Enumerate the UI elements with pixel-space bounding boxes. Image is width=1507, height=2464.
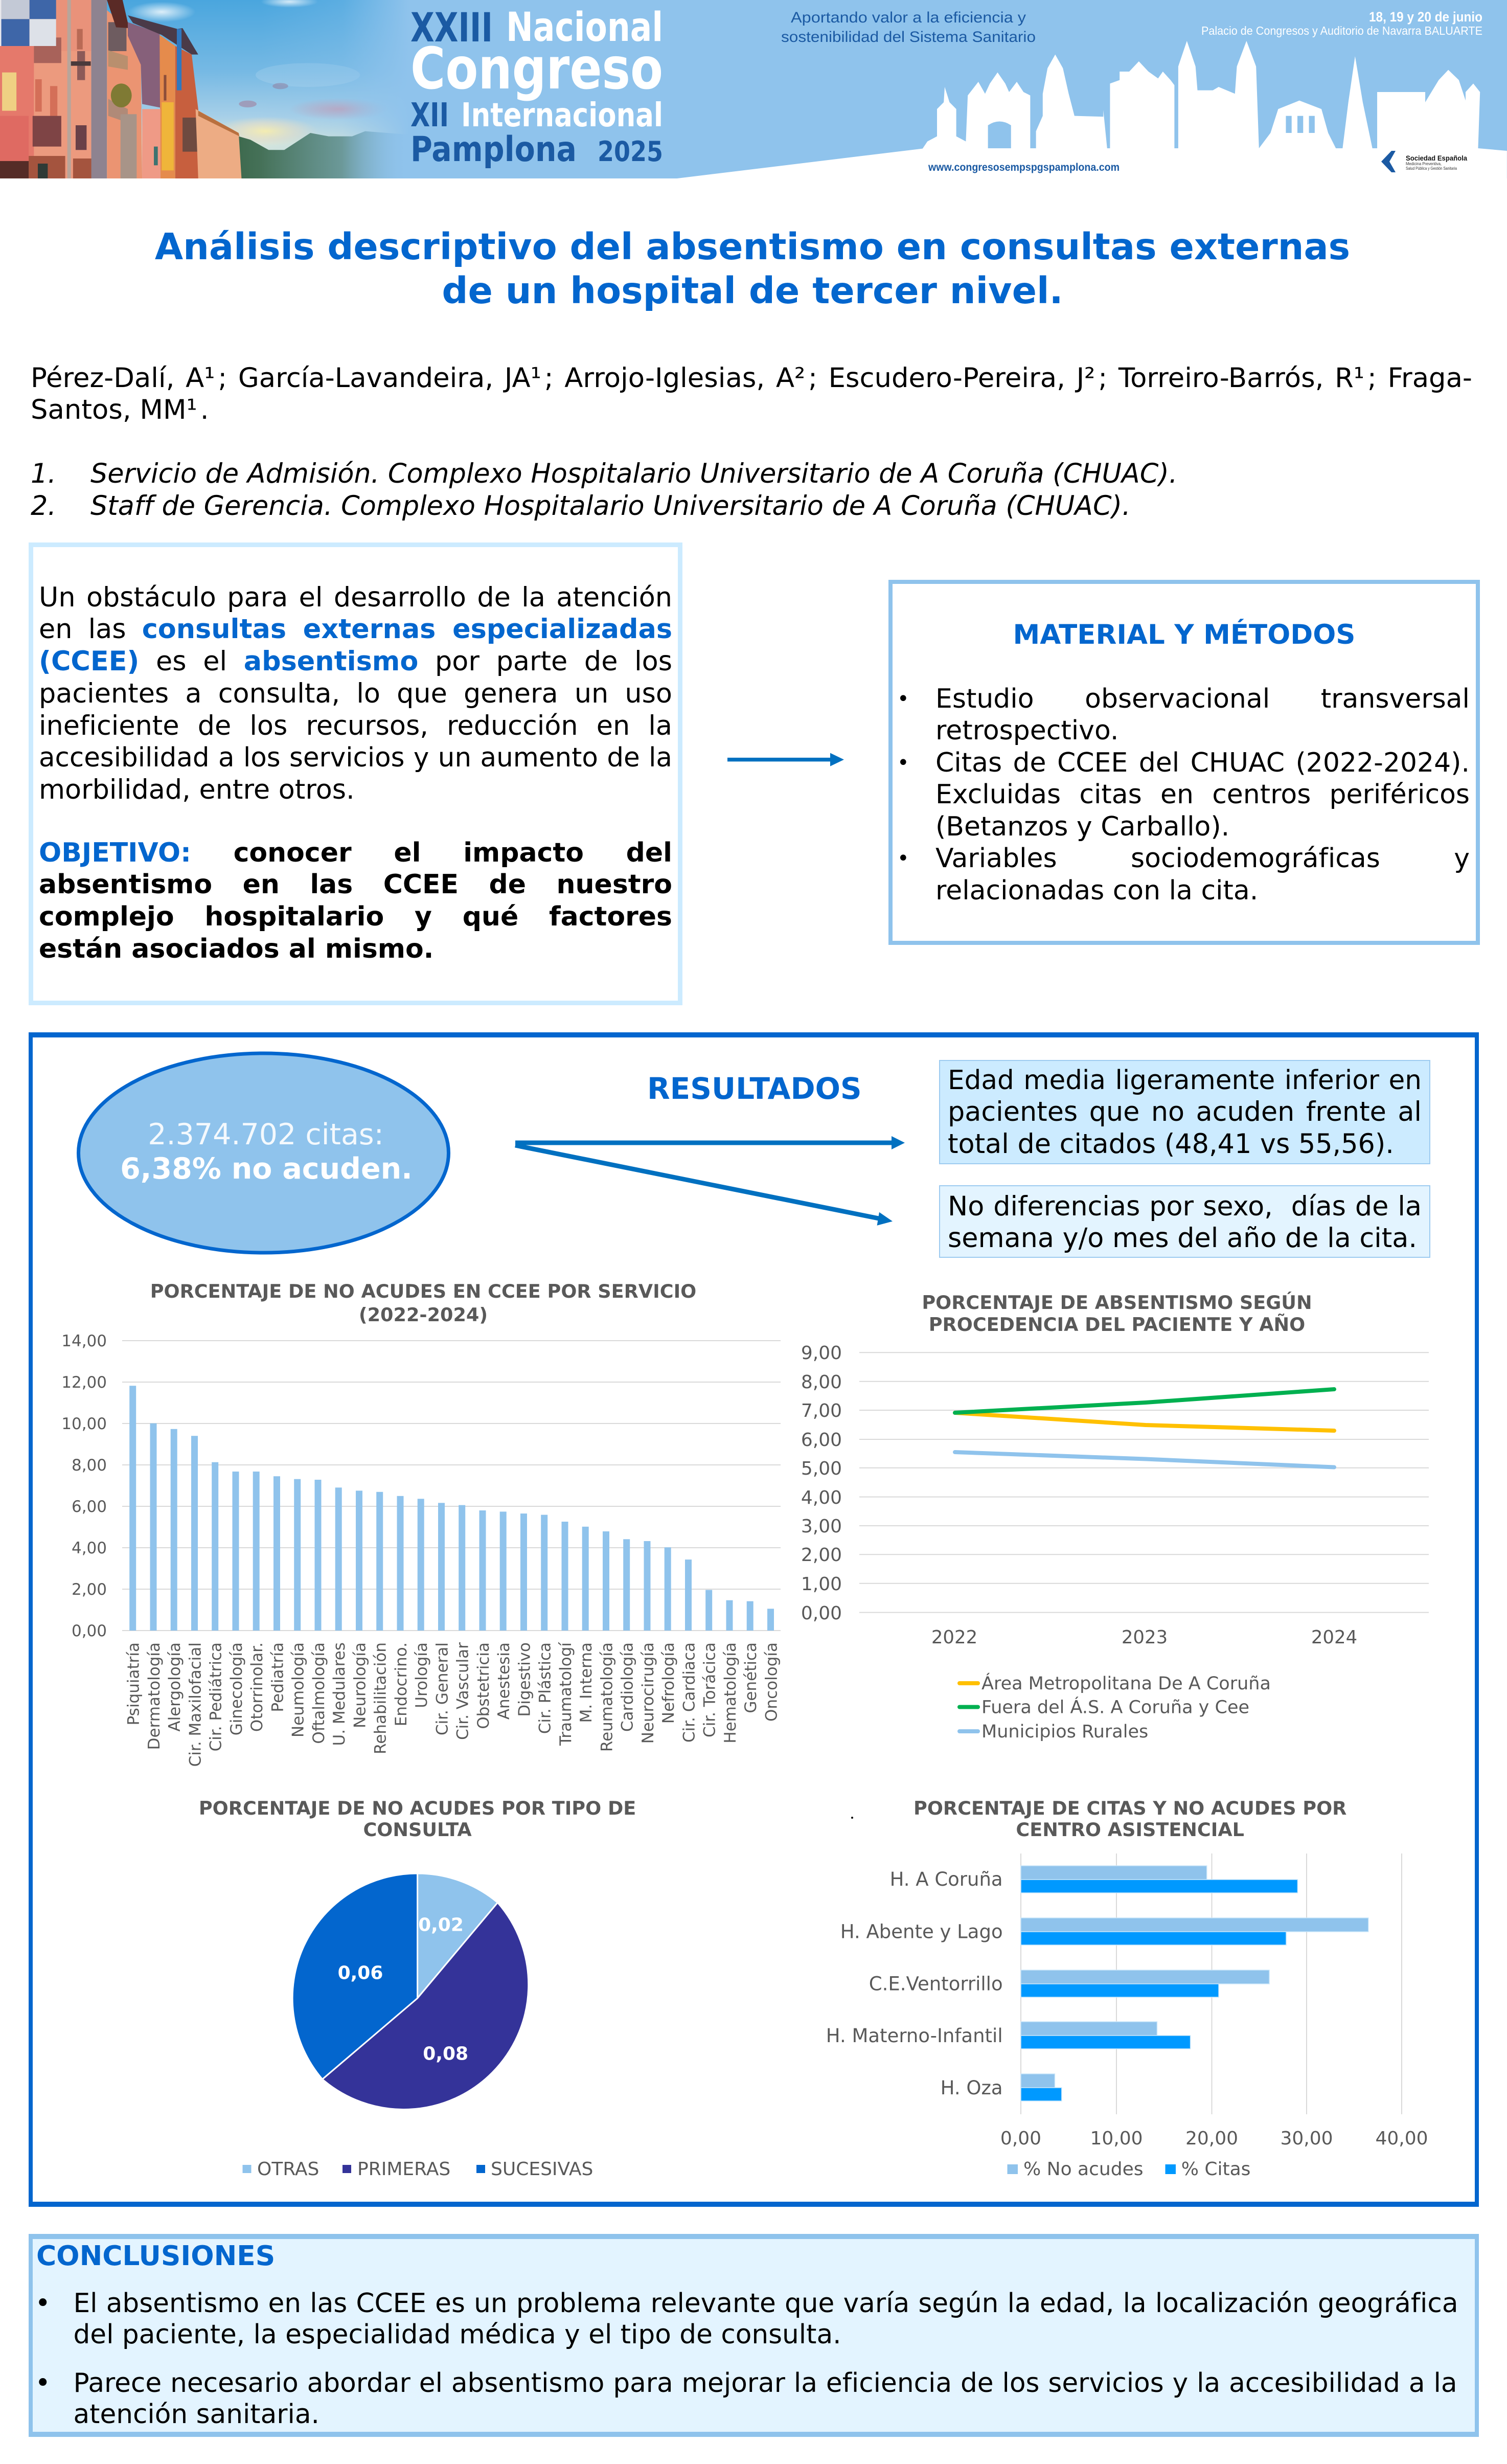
panel: conclusiones: • xyxy=(35,2288,51,2319)
bar chart: no-shows by service: Oncología xyxy=(763,1642,781,1722)
congress name: 2025 xyxy=(598,135,663,168)
bar chart: no-shows by service: Ginecología xyxy=(227,1642,246,1735)
conclusion one: del paciente, la especialidad médica y el tipo de consulta. xyxy=(74,2319,841,2350)
objective text: absentismo en las CCEE de nuestro xyxy=(39,869,672,900)
pie chart: no-shows by consultation type: PORCENTAJE DE NO ACUDES POR TIPO DE xyxy=(199,1797,636,1819)
conclusion two xyxy=(35,2368,1457,2430)
callout: total appointments ellipse xyxy=(77,1051,450,1255)
conclusion two: Parece necesario abordar el absentismo para mejorar la eficiencia de los servicios y la accesibilidad a la xyxy=(74,2368,1457,2399)
bar chart: appointments and no-shows by centre: C.E.Ventorrillo xyxy=(869,1973,1003,1995)
panel: material y metodos: • xyxy=(897,751,909,775)
methods list: Estudio observacional transversal xyxy=(935,684,1470,714)
line chart: absenteeism by origin and year: 0,00 xyxy=(801,1603,842,1624)
congress tagline: sostenibilidad del Sistema Sanitario xyxy=(781,29,1036,46)
bar chart: no-shows by service xyxy=(61,1280,781,1767)
conclusion one: El absentismo en las CCEE es un problema relevante que varía según la edad, la localización geográfica xyxy=(74,2288,1458,2319)
bar chart: no-shows by service: Cir. Pediátrica xyxy=(207,1642,225,1751)
bar chart: appointments and no-shows by centre: 40,00 xyxy=(1375,2128,1428,2149)
bar chart: no-shows by service: Alergología xyxy=(166,1642,184,1732)
objective text: complejo hospitalario y qué factores xyxy=(39,901,672,932)
bar chart: no-shows by service: 0,00 xyxy=(72,1622,107,1640)
introduction text: accesibilidad a los servicios y un aumento de la xyxy=(39,742,672,773)
methods list: relacionadas con la cita. xyxy=(935,875,1258,906)
bar chart: no-shows by service: 10,00 xyxy=(61,1415,107,1433)
bar chart: appointments and no-shows by centre: CENTRO ASISTENCIAL xyxy=(1016,1819,1244,1841)
bar chart: no-shows by service: 2,00 xyxy=(72,1580,107,1599)
bar chart: no-shows by service: Anestesia xyxy=(495,1642,513,1720)
bar chart: appointments and no-shows by centre: % No acudes xyxy=(1023,2159,1143,2180)
bar chart: no-shows by service: Pediatría xyxy=(269,1642,287,1712)
line chart: absenteeism by origin and year: 2023 xyxy=(1122,1627,1168,1648)
authors: Pérez-Dalí, A¹; García-Lavandeira, JA¹; Arrojo-Iglesias, A²; Escudero-Pereira, J²; Torreiro-Barrós, R¹; Fraga- xyxy=(31,363,1472,394)
bar chart: no-shows by service: 6,00 xyxy=(72,1498,107,1516)
bar chart: no-shows by service: 8,00 xyxy=(72,1456,107,1475)
bar chart: no-shows by service: Dermatología xyxy=(145,1642,164,1750)
authors xyxy=(31,363,1472,425)
panel: resultados xyxy=(29,1032,1479,2207)
bar chart: no-shows by service: Genética xyxy=(742,1642,760,1713)
methods list: (Betanzos y Carballo). xyxy=(935,811,1229,842)
bar chart: appointments and no-shows by centre: H. Abente y Lago xyxy=(840,1921,1003,1943)
affiliations: Servicio de Admisión. Complexo Hospitalario Universitario de A Coruña (CHUAC). xyxy=(90,458,1177,489)
society logo: Salud Pública y Gestión Sanitaria xyxy=(1406,166,1457,171)
bar chart: appointments and no-shows by centre: 10,00 xyxy=(1090,2128,1143,2149)
bar chart: no-shows by service: Reumatología xyxy=(598,1642,616,1752)
line chart: absenteeism by origin and year: 2024 xyxy=(1311,1627,1357,1648)
line chart: absenteeism by origin and year xyxy=(801,1291,1429,1742)
line chart: absenteeism by origin and year: 1,00 xyxy=(801,1574,842,1595)
bar chart: no-shows by service: 4,00 xyxy=(72,1539,107,1557)
date and venue: 18, 19 y 20 de junio xyxy=(1369,9,1482,25)
affiliations: 2. xyxy=(31,490,56,522)
congress name: Congreso xyxy=(410,36,663,102)
congress name: Nacional xyxy=(506,5,663,51)
bar chart: no-shows by service: Cir. Torácica xyxy=(701,1642,719,1737)
bar chart: no-shows by service: Nefrología xyxy=(659,1642,678,1724)
line chart: absenteeism by origin and year: 2022 xyxy=(931,1627,977,1648)
introduction text: ineficiente de los recursos, reducción en la xyxy=(39,710,672,741)
bar chart: no-shows by service: M. Interna xyxy=(577,1642,596,1723)
line chart: absenteeism by origin and year: 2,00 xyxy=(801,1545,842,1566)
objective text xyxy=(39,838,672,964)
callout: total appointments ellipse: 6,38% no acuden. xyxy=(120,1152,413,1186)
congress name xyxy=(410,5,663,170)
date and venue xyxy=(1201,9,1482,37)
methods list: Citas de CCEE del CHUAC (2022-2024). xyxy=(935,748,1470,778)
skyline silhouette xyxy=(673,41,1507,179)
bar chart: no-shows by service: Hematología xyxy=(721,1642,740,1744)
bar chart: no-shows by service: Rehabilitación xyxy=(372,1642,390,1754)
bar chart: no-shows by service: 14,00 xyxy=(61,1332,107,1350)
heading: resultados: RESULTADOS xyxy=(647,1071,862,1106)
title: Análisis descriptivo del absentismo en consultas externas xyxy=(155,225,1350,268)
title: de un hospital de tercer nivel. xyxy=(442,269,1063,312)
pie chart: no-shows by consultation type: OTRAS xyxy=(257,2159,319,2180)
panel: conclusiones: • xyxy=(35,2368,51,2399)
bar chart: no-shows by service: Otorrinolar. xyxy=(248,1642,266,1732)
conclusions heading: CONCLUSIONES xyxy=(36,2240,275,2272)
line chart: absenteeism by origin and year: 7,00 xyxy=(801,1400,842,1421)
introduction text: pacientes a consulta, lo que genera un uso xyxy=(39,678,672,709)
introduction text xyxy=(39,582,672,805)
methods list: retrospectivo. xyxy=(935,715,1118,746)
bar chart: no-shows by service: Cir. Plástica xyxy=(536,1642,555,1734)
bar chart: appointments and no-shows by centre: H. A Coruña xyxy=(890,1868,1003,1890)
objective text: OBJETIVO: conocer el impacto del xyxy=(39,838,672,868)
bar chart: no-shows by service: Psiquiatría xyxy=(125,1642,143,1725)
bar chart: no-shows by service: Neurocirugía xyxy=(639,1642,657,1744)
bar chart: no-shows by service: Oftalmología xyxy=(310,1642,328,1744)
line chart: absenteeism by origin and year: 8,00 xyxy=(801,1372,842,1393)
bar chart: no-shows by service: Cir. Vascular xyxy=(454,1642,472,1740)
bar chart: no-shows by service: (2022-2024) xyxy=(359,1304,488,1326)
introduction text: morbilidad, entre otros. xyxy=(39,774,355,805)
bar chart: no-shows by service: Digestivo xyxy=(515,1642,534,1716)
congress url: www.congresosempspgspamplona.com xyxy=(928,162,1120,173)
objective text: están asociados al mismo. xyxy=(39,934,433,964)
conclusion one xyxy=(35,2288,1458,2350)
pie chart: no-shows by consultation type: 0,08 xyxy=(423,2044,468,2065)
congress tagline xyxy=(781,9,1036,46)
bar chart: no-shows by service: U. Medulares xyxy=(330,1642,349,1746)
congress name: XXIII xyxy=(410,5,493,51)
bar chart: appointments and no-shows by centre: PORCENTAJE DE CITAS Y NO ACUDES POR xyxy=(914,1797,1346,1819)
bar chart: appointments and no-shows by centre: H. Oza xyxy=(941,2077,1003,2099)
bar chart: appointments and no-shows by centre: 20,00 xyxy=(1185,2128,1238,2149)
bar chart: no-shows by service: Cir. General xyxy=(433,1642,452,1735)
panel: material y metodos: • xyxy=(897,847,909,870)
bar chart: no-shows by service: Urología xyxy=(413,1642,431,1708)
line chart: absenteeism by origin and year: 3,00 xyxy=(801,1516,842,1537)
header photo xyxy=(0,0,409,178)
authors: Santos, MM¹. xyxy=(31,394,209,425)
panel: introduction and objective xyxy=(29,542,682,1005)
bar chart: no-shows by service: PORCENTAJE DE NO ACUDES EN CCEE POR SERVICIO xyxy=(150,1280,696,1302)
society logo xyxy=(1381,151,1467,172)
line chart: absenteeism by origin and year: Municipios Rurales xyxy=(981,1722,1148,1742)
line chart: absenteeism by origin and year: Fuera del Á.S. A Coruña y Cee xyxy=(981,1697,1249,1718)
methods list: Variables sociodemográficas y xyxy=(935,843,1470,874)
affiliations: Staff de Gerencia. Complexo Hospitalario Universitario de A Coruña (CHUAC). xyxy=(90,490,1131,522)
affiliations: 1. xyxy=(31,458,56,489)
finding: mean age xyxy=(939,1060,1430,1164)
bar chart: appointments and no-shows by centre: 0,00 xyxy=(1000,2128,1041,2149)
line chart: absenteeism by origin and year: 6,00 xyxy=(801,1430,842,1451)
line chart: absenteeism by origin and year: 4,00 xyxy=(801,1487,842,1508)
panel: material y metodos xyxy=(888,580,1480,945)
arrows to findings xyxy=(515,1136,905,1226)
panel: conclusiones xyxy=(29,2234,1479,2437)
bar chart: no-shows by service: Endocrino. xyxy=(392,1642,410,1726)
finding: no differences xyxy=(939,1185,1430,1258)
pie chart: no-shows by consultation type: PRIMERAS xyxy=(357,2159,450,2180)
date and venue: Palacio de Congresos y Auditorio de Navarra BALUARTE xyxy=(1201,24,1482,37)
line chart: absenteeism by origin and year: 5,00 xyxy=(801,1458,842,1479)
introduction text: en las consultas externas especializadas xyxy=(39,614,672,645)
bar chart: no-shows by service: Neumología xyxy=(289,1642,308,1737)
methods list: Excluidas citas en centros periféricos xyxy=(935,779,1470,810)
bar chart: appointments and no-shows by centre: H. Materno-Infantil xyxy=(826,2025,1003,2047)
congress tagline: Aportando valor a la eficiencia y xyxy=(791,9,1026,26)
title xyxy=(155,225,1350,312)
line chart: absenteeism by origin and year: PROCEDENCIA DEL PACIENTE Y AÑO xyxy=(929,1313,1305,1336)
finding: mean age: Edad media ligeramente inferior en xyxy=(948,1065,1422,1096)
pie chart: no-shows by consultation type xyxy=(199,1797,636,2180)
bar chart: appointments and no-shows by centre xyxy=(826,1797,1428,2180)
panel: material y metodos: • xyxy=(897,687,909,711)
bar chart: no-shows by service: Traumatologí xyxy=(557,1642,575,1746)
bar chart: no-shows by service: Obstetricia xyxy=(474,1642,493,1729)
bar chart: no-shows by service: Cir. Cardiaca xyxy=(680,1642,698,1743)
introduction text: Un obstáculo para el desarrollo de la atención xyxy=(39,582,672,613)
affiliations xyxy=(31,458,1177,522)
finding: no differences: No diferencias por sexo, días de la xyxy=(948,1191,1422,1222)
finding: no differences: semana y/o mes del año de la cita. xyxy=(948,1223,1417,1254)
finding: mean age: total de citados (48,41 vs 55,56). xyxy=(948,1128,1394,1160)
bar chart: appointments and no-shows by centre: % Citas xyxy=(1181,2159,1250,2180)
pie chart: no-shows by consultation type: 0,06 xyxy=(338,1963,383,1984)
methods list xyxy=(897,684,1470,906)
congress name: XII xyxy=(410,97,449,134)
line chart: absenteeism by origin and year: Área Metropolitana De A Coruña xyxy=(981,1672,1271,1694)
pie chart: no-shows by consultation type: 0,02 xyxy=(418,1914,464,1936)
bar chart: appointments and no-shows by centre: 30,00 xyxy=(1280,2128,1333,2149)
bar chart: no-shows by service: Neurología xyxy=(351,1642,369,1728)
line chart: absenteeism by origin and year: 9,00 xyxy=(801,1343,842,1364)
callout: total appointments ellipse: 2.374.702 citas: xyxy=(148,1118,384,1151)
society logo: Sociedad Española xyxy=(1406,154,1467,162)
arrow: introduction to methods xyxy=(727,753,844,766)
congress name: Internacional xyxy=(461,97,663,134)
bar chart: no-shows by service: 12,00 xyxy=(61,1373,107,1392)
methods heading: MATERIAL Y MÉTODOS xyxy=(1013,619,1355,650)
congress name: Pamplona xyxy=(410,129,577,170)
conclusion two: atención sanitaria. xyxy=(74,2399,319,2430)
bar chart: no-shows by service: Cardiología xyxy=(619,1642,637,1732)
introduction text: (CCEE) es el absentismo por parte de los xyxy=(39,646,672,677)
finding: mean age: pacientes que no acuden frente al xyxy=(948,1096,1422,1127)
society logo: Medicina Preventiva, xyxy=(1406,162,1442,166)
pie chart: no-shows by consultation type: CONSULTA xyxy=(363,1819,472,1841)
pie chart: no-shows by consultation type: SUCESIVAS xyxy=(491,2159,593,2180)
line chart: absenteeism by origin and year: PORCENTAJE DE ABSENTISMO SEGÚN xyxy=(922,1291,1312,1314)
header banner xyxy=(0,0,1507,178)
bar chart: no-shows by service: Cir. Maxilofacial xyxy=(186,1642,204,1767)
